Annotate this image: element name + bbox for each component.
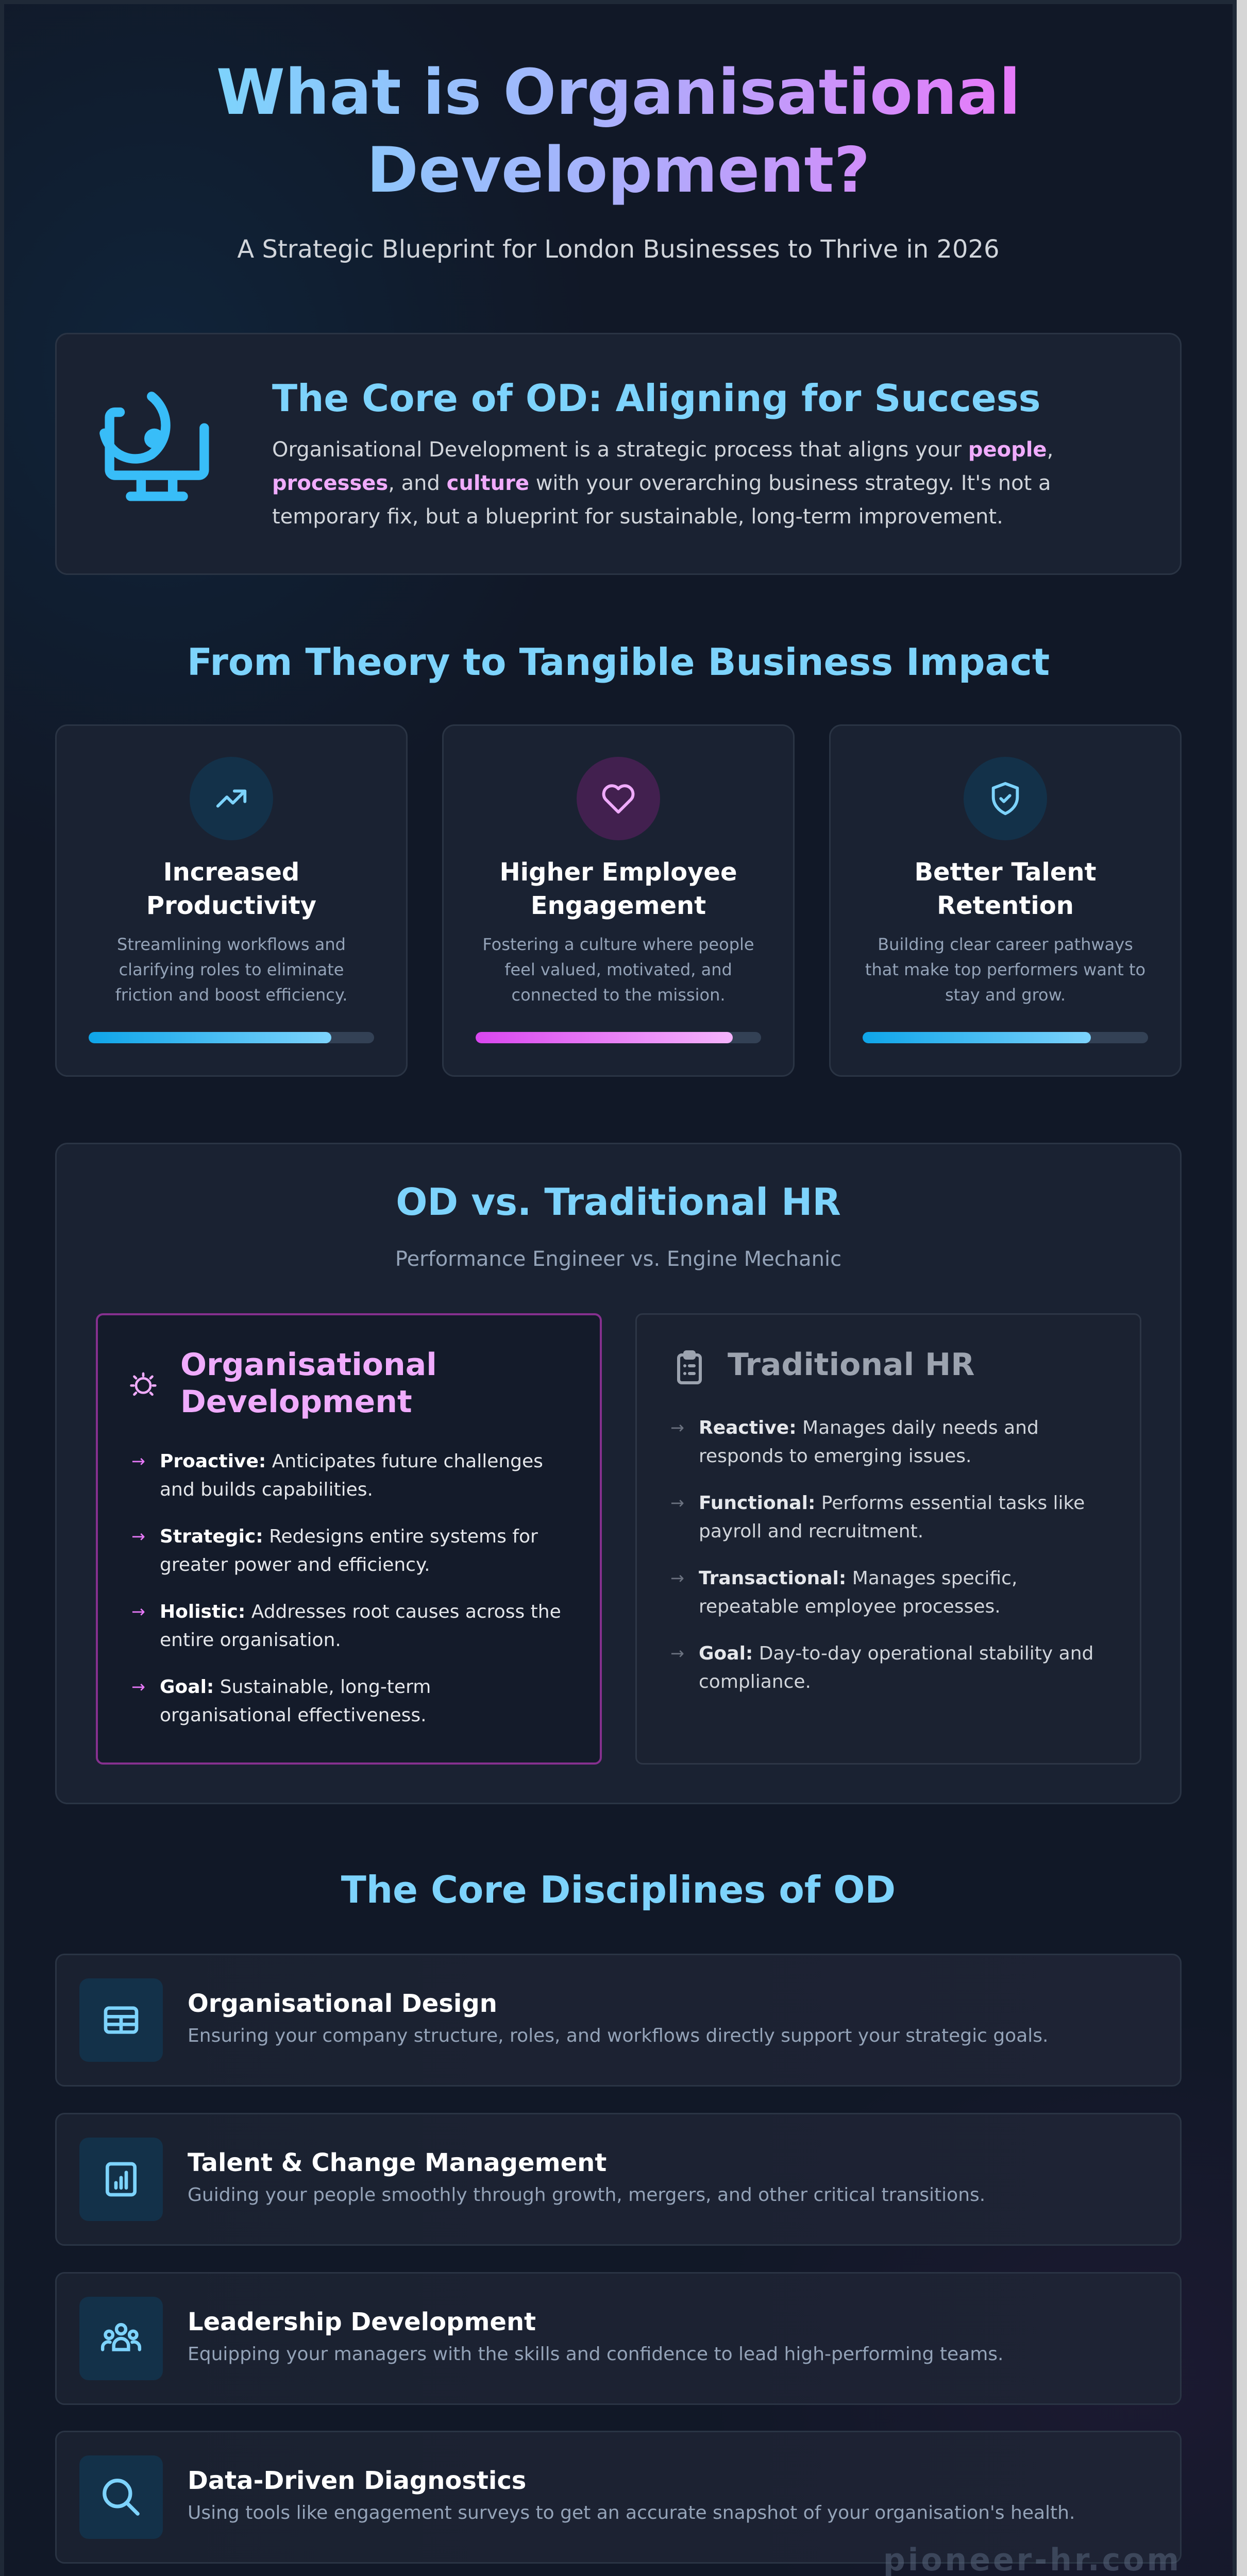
card: engagement: [442, 724, 795, 1077]
description: Equipping your managers with the skills and confidence to lead high-performing teams.: [188, 2344, 1003, 2365]
item: →: [131, 1527, 145, 1546]
card: retention: [829, 724, 1182, 1077]
card title: [146, 858, 316, 920]
discipline: diagnostics: [55, 2431, 1182, 2564]
item: →: [670, 1568, 684, 1588]
panel: OD vs HR: [55, 1143, 1182, 1804]
discipline: organisational design: [55, 1954, 1182, 2087]
title: Leadership Development: [188, 2308, 536, 2336]
icon: trend up: [190, 757, 273, 840]
heading: [180, 1347, 437, 1420]
item: Holistic: Addresses root causes across the entire organisation.: [160, 1601, 561, 1651]
body text: Organisational Development is a strategic process that aligns your people, processes, and culture with your overarching business strategy. It's not a temporary fix, but a blueprint for sustainable, long-term improvement.: [272, 438, 1053, 529]
card text: Building clear career pathways that make top performers want to stay and grow.: [865, 935, 1145, 1005]
item: Functional: Performs essential tasks like payroll and recruitment.: [699, 1493, 1085, 1542]
item: Strategic: Redesigns entire systems for greater power and efficiency.: [160, 1526, 538, 1575]
card title: Engagement: [531, 891, 706, 920]
title: Data-Driven Diagnostics: [188, 2466, 526, 2495]
title: [216, 56, 1020, 207]
heading: The Core of OD: Aligning for Success: [272, 377, 1040, 420]
list: [131, 1451, 561, 1726]
item: Proactive: Anticipates future challenges and builds capabilities.: [160, 1451, 543, 1500]
card text: Fostering a culture where people feel valued, motivated, and connected to the mission.: [482, 935, 754, 1005]
subheading: Performance Engineer vs. Engine Mechanic: [395, 1247, 841, 1271]
discipline: talent & change: [55, 2113, 1182, 2246]
heading: theory to impact: From Theory to Tangible Business Impact: [187, 640, 1050, 684]
item: Goal: Day-to-day operational stability and compliance.: [699, 1643, 1093, 1692]
heading: Organisational: [180, 1347, 437, 1383]
card title: Increased: [163, 858, 299, 887]
icon: people: [79, 2297, 163, 2380]
discipline: leadership: [55, 2272, 1182, 2405]
icon: headset monitor: [99, 392, 209, 501]
icon: chart: [79, 2138, 163, 2221]
item: →: [131, 1451, 145, 1471]
progress bar: [476, 1032, 761, 1043]
heading: OD vs. Traditional HR: [396, 1180, 841, 1224]
description: Using tools like engagement surveys to get an accurate snapshot of your organisation's health.: [188, 2502, 1075, 2523]
icon: heart: [577, 757, 660, 840]
icon: search: [79, 2455, 163, 2539]
title: Development?: [367, 134, 870, 207]
icon: clipboard: [677, 1350, 702, 1384]
description: Guiding your people smoothly through growth, mergers, and other critical transitions.: [188, 2184, 985, 2206]
progress bar: [863, 1032, 1148, 1043]
heading: Development: [180, 1384, 412, 1420]
item: →: [670, 1418, 684, 1437]
card title: [914, 858, 1097, 920]
item: Goal: Sustainable, long-term: [160, 1676, 431, 1698]
list: [670, 1417, 1093, 1692]
card title: Better Talent: [914, 858, 1097, 887]
card title: Higher Employee: [499, 858, 737, 887]
item: →: [670, 1643, 684, 1663]
card title: Retention: [937, 891, 1074, 920]
title: Talent & Change Management: [188, 2148, 606, 2177]
box: Traditional HR: [635, 1313, 1141, 1765]
card text: Streamlining workflows and clarifying roles to eliminate friction and boost efficiency.: [115, 935, 347, 1005]
description: Ensuring your company structure, roles, and workflows directly support your strategic goals.: [188, 2025, 1048, 2046]
item: [131, 1676, 431, 1726]
title: What is Organisational: [216, 56, 1020, 129]
progress bar: [89, 1032, 374, 1043]
icon: shield: [964, 757, 1047, 840]
card title: [499, 858, 737, 920]
icon: table: [79, 1978, 163, 2062]
item: Reactive: Manages daily needs and responds to emerging issues.: [699, 1417, 1039, 1467]
heading: Traditional HR: [728, 1347, 974, 1383]
item: →: [131, 1602, 145, 1621]
card: productivity: [55, 724, 408, 1077]
card title: Productivity: [146, 891, 316, 920]
title: Organisational Design: [188, 1989, 497, 2018]
icon: bug/gear: [130, 1372, 157, 1396]
subtitle: A Strategic Blueprint for London Businesses to Thrive in 2026: [237, 235, 1000, 264]
item: →: [131, 1677, 145, 1697]
panel: core of OD: [55, 333, 1182, 575]
item: Transactional: Manages specific, repeatable employee processes.: [699, 1568, 1017, 1617]
box: OD: [96, 1313, 602, 1765]
item: →: [670, 1493, 684, 1513]
item: organisational effectiveness.: [160, 1705, 427, 1726]
heading: core disciplines: The Core Disciplines of OD: [341, 1868, 896, 1911]
